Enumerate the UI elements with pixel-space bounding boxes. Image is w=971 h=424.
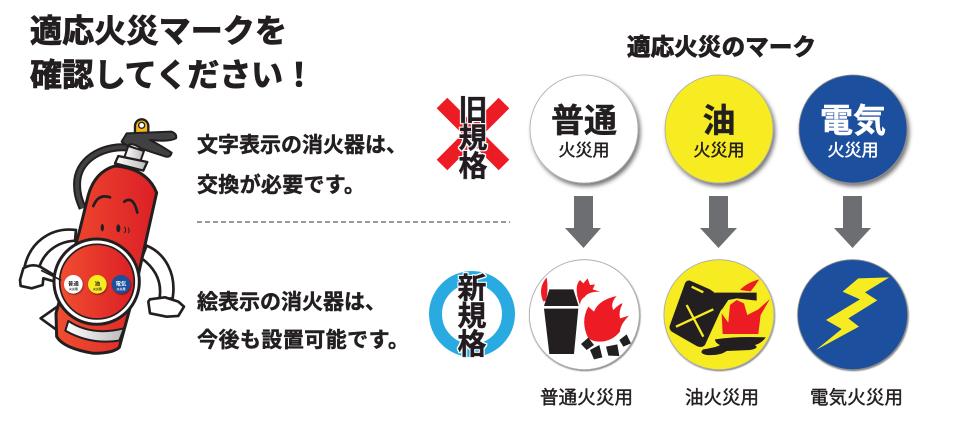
old standard: crossed out: 旧 [458,95,488,127]
new standard: blue ring: 格 [457,328,487,361]
caption: electric fire: 電気火災用 [810,387,903,408]
mini badge: electric [112,275,130,294]
badge: electric fire text: 火災用 [828,141,878,160]
badge: electric fire text [799,75,907,183]
title: 適応火災マークを [30,13,287,49]
heading: applicable fire marks: 適応火災のマーク [627,34,816,60]
badge: oil fire text: 油 [702,102,736,139]
mini badge: electric: 火災用 [117,287,125,291]
mini badge: oil [88,275,107,294]
mini badge: oil: 火災用 [93,287,102,291]
arrow: ordinary [565,196,601,248]
badge: oil fire text: 火災用 [694,141,744,160]
mini badge: ordinary: 普通 [68,279,79,287]
caption: ordinary fire: 普通火災用 [540,387,633,408]
mini badge: electric: 電気 [116,279,127,287]
title [30,13,315,93]
arrow: electric [834,196,871,248]
text: new label explanation: 今後も設置可能です。 [197,329,409,352]
arrow: oil [700,196,737,248]
new standard: blue ring: 規 [457,300,487,333]
icon: electric fire pictogram [798,260,908,370]
text: old label explanation [197,134,407,197]
caption: oil fire: 油火災用 [685,387,759,408]
text: new label explanation: 絵表示の消火器は、 [197,291,386,314]
text: new label explanation [197,291,409,352]
icon: extinguisher mascot [20,119,184,353]
badge: electric fire text: 電気 [820,102,886,139]
text: old label explanation: 交換が必要です。 [197,173,365,197]
badge: ordinary fire text: 普通 [551,102,617,139]
badge: oil fire text [665,75,773,183]
old standard: crossed out: 格 [458,150,488,183]
new standard: blue ring [436,272,508,361]
title: 確認してください！ [30,57,315,93]
text: old label explanation: 文字表示の消火器は、 [197,134,407,157]
badge: ordinary fire text [530,75,638,183]
icon: oil fire pictogram [664,260,774,370]
new standard: blue ring: 新 [457,272,487,305]
old standard: crossed out: 規 [458,122,488,155]
mini badge: ordinary [64,275,83,294]
badge: ordinary fire text: 火災用 [558,141,610,160]
mini badge: oil: 油 [95,279,100,287]
old standard: crossed out [442,95,504,183]
mini badge: ordinary: 火災用 [69,287,78,291]
icon: ordinary fire pictogram [529,260,639,370]
